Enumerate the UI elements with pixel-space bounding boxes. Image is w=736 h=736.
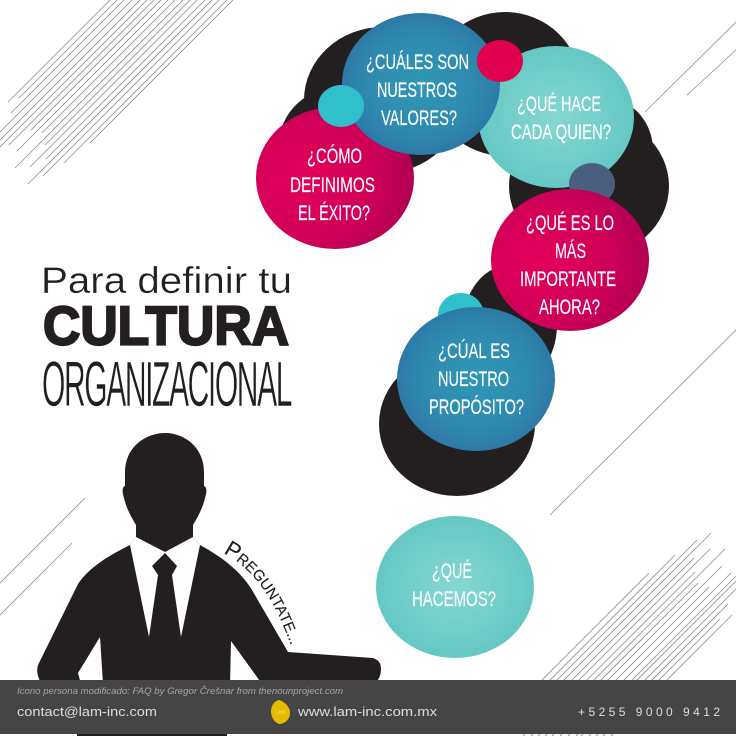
connector dot: teal behind purpose bubble bbox=[438, 293, 484, 337]
bubble: ¿Cúal es nuestro propósito?: PROPÓSITO? bbox=[429, 396, 524, 419]
bubble: ¿Qué es lo más importante ahora?: MÁS bbox=[555, 240, 586, 263]
question mark: black backing shapes bbox=[279, 12, 669, 496]
footer bar bbox=[0, 680, 736, 736]
bubble: ¿Cuáles son nuestros valores? bbox=[342, 13, 500, 155]
bubble: ¿Qué hace cada quien? bbox=[478, 46, 634, 188]
website: www.lam-inc.com.mx bbox=[297, 704, 438, 719]
bubble: ¿Cuáles son nuestros valores?: ¿CUÁLES SON bbox=[366, 51, 469, 74]
title bbox=[41, 260, 292, 420]
bubble: ¿Cuáles son nuestros valores?: VALORES? bbox=[381, 107, 457, 130]
bubble: ¿Cómo definimos el éxito? bbox=[256, 107, 414, 249]
shirt collar bbox=[130, 537, 200, 637]
title: CULTURA bbox=[43, 294, 289, 356]
icon: yellow logo: LAM bbox=[275, 710, 286, 716]
icon: yellow logo bbox=[271, 700, 290, 724]
bubble: ¿Cuáles son nuestros valores?: NUESTROS bbox=[377, 79, 457, 102]
email: contact@lam-inc.com bbox=[17, 704, 157, 719]
diagonal lines: top left bbox=[0, 0, 233, 184]
phone: +5255 9000 9412 bbox=[578, 705, 720, 719]
text: ORGANIZACIONAL bbox=[42, 348, 292, 420]
bubble: ¿Qué es lo más importante ahora?: ¿QUÉ ES LO bbox=[526, 212, 614, 235]
diagonal lines: top right bbox=[645, 22, 736, 112]
title: Para definir tu bbox=[41, 260, 292, 301]
bubble: ¿Qué es lo más importante ahora? bbox=[491, 189, 649, 331]
bubble: ¿Cómo definimos el éxito?: DEFINIMOS bbox=[290, 174, 375, 197]
curved text: Pregúntate: PREGUNTATE... bbox=[224, 540, 296, 644]
bubble: ¿Qué hacemos?: ¿QUÉ bbox=[432, 560, 472, 583]
bubble: ¿Qué hace cada quien?: ¿QUÉ HACE bbox=[517, 93, 601, 116]
bubble: ¿Cúal es nuestro propósito?: NUESTRO bbox=[438, 368, 509, 391]
connector dot: slate bbox=[569, 163, 615, 205]
bubble: ¿Qué hacemos? bbox=[376, 516, 534, 658]
credit line: Icono persona modificado: FAQ by Gregor Črešnar from thenounproject.com bbox=[17, 686, 343, 697]
diagonal lines: bottom right bbox=[486, 533, 736, 736]
bubble: ¿Qué es lo más importante ahora?: AHORA? bbox=[539, 296, 600, 319]
connector dot: teal bbox=[318, 85, 364, 127]
diagonal line: middle right bbox=[550, 330, 736, 515]
bubble: ¿Qué hace cada quien?: CADA QUIEN? bbox=[511, 121, 611, 144]
bubble: ¿Cúal es nuestro propósito? bbox=[397, 307, 555, 451]
bubble: ¿Cómo definimos el éxito?: ¿CÓMO bbox=[307, 145, 362, 168]
bubble: ¿Cómo definimos el éxito?: EL ÉXITO? bbox=[298, 202, 370, 225]
bubble: ¿Cúal es nuestro propósito?: ¿CÚAL ES bbox=[438, 340, 510, 363]
bubble: ¿Qué es lo más importante ahora?: IMPORTANTE bbox=[520, 268, 616, 291]
connector dot: pink bbox=[477, 40, 523, 82]
icon: person silhouette bbox=[37, 433, 381, 684]
diagonal lines: lower left bbox=[0, 498, 85, 615]
bubble: ¿Qué hacemos?: HACEMOS? bbox=[412, 588, 496, 611]
